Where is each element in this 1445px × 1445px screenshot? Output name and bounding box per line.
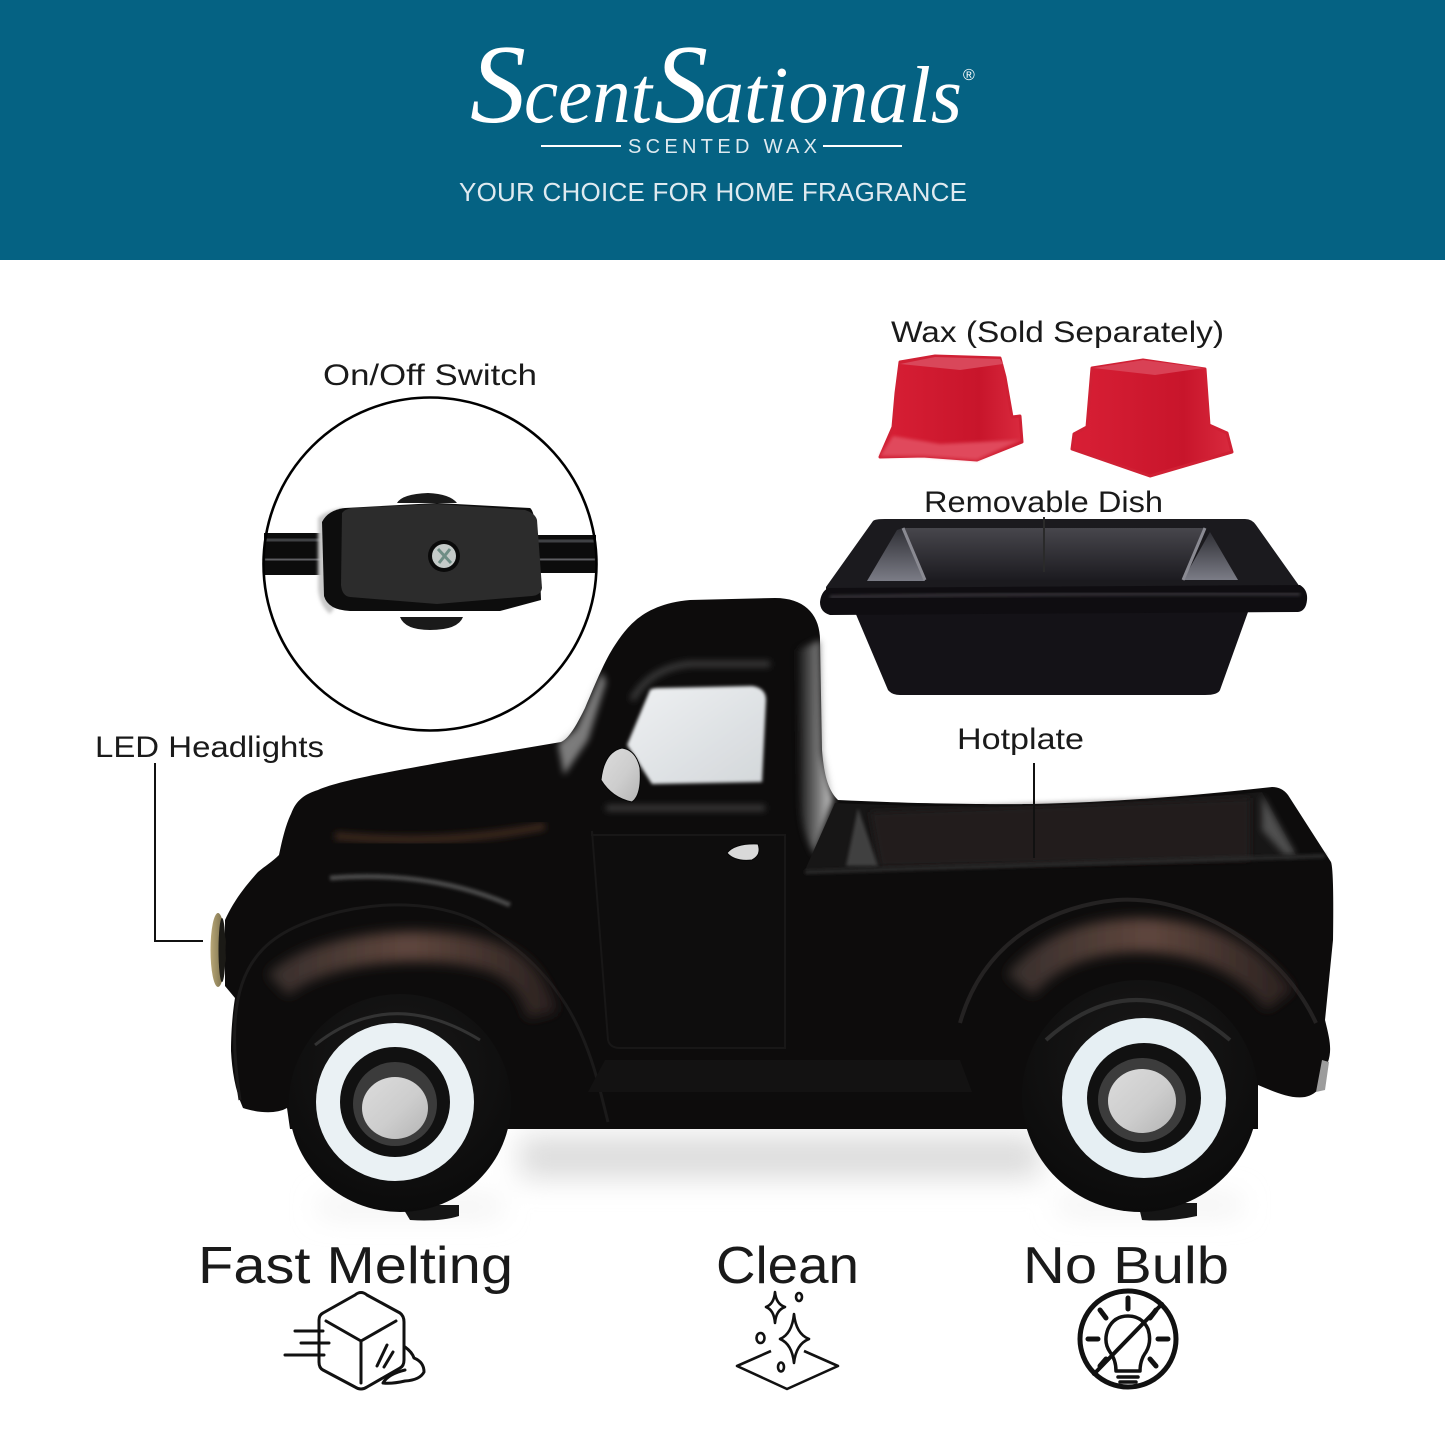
panel: on/off switch (264, 359, 596, 730)
logo subtitle: SCENTED WAX (628, 136, 817, 158)
front fender sheen (278, 946, 542, 1015)
cab window (627, 686, 766, 784)
leader line: removable dish (1043, 517, 1045, 572)
rubber feet (401, 1203, 1197, 1220)
rear wheel (1022, 980, 1258, 1212)
windshield pillar highlight (558, 672, 606, 775)
logo wordmark: ® (963, 67, 975, 84)
feature: clean (716, 1237, 859, 1389)
truck (210, 598, 1333, 1220)
switch circle outline (264, 398, 596, 730)
label: on/off switch: On/Off Switch (323, 359, 537, 392)
panel: wax cubes (880, 316, 1232, 476)
heading: fast melting: Fast Melting (198, 1237, 513, 1295)
front fender (235, 905, 608, 1122)
label: wax: Wax (Sold Separately) (891, 316, 1224, 349)
feature: no bulb (1023, 1237, 1229, 1387)
leader line: hotplate (1033, 763, 1035, 858)
side mirror (601, 748, 640, 802)
icon: crossed-out light bulb (1080, 1291, 1176, 1387)
rear fender (960, 900, 1316, 1023)
logo wordmark (470, 23, 975, 147)
label: removable dish: Removable Dish (924, 486, 1163, 519)
truck body silhouette (225, 598, 1333, 1129)
label: hotplate: Hotplate (957, 723, 1084, 756)
headlight (210, 913, 226, 987)
heading: no bulb: No Bulb (1023, 1237, 1229, 1295)
switch photo (264, 493, 596, 630)
rear fender sheen (1020, 935, 1280, 1000)
rear lamp (1316, 1060, 1329, 1092)
logo wordmark: S (654, 23, 708, 147)
floor shadow under truck (320, 1136, 1240, 1214)
wax cube left (880, 356, 1022, 460)
callout: LED headlights (95, 731, 324, 941)
wax cube right (1072, 360, 1232, 476)
logo wordmark: cent (524, 52, 654, 140)
door outline (592, 831, 785, 1048)
heading: clean: Clean (716, 1237, 859, 1295)
cab rear sheen (797, 640, 833, 855)
running board (588, 1060, 972, 1092)
icon: sparkling clean surface (737, 1292, 838, 1389)
logo wordmark: S (470, 23, 526, 147)
window frame sheen (606, 664, 770, 808)
bed interior (805, 792, 1296, 870)
feature: fast melting (198, 1237, 513, 1389)
panel: removable dish (820, 486, 1307, 695)
callout: hotplate (957, 723, 1084, 858)
dish photo (820, 519, 1307, 695)
door handle (727, 844, 759, 860)
hood sheen (335, 826, 545, 839)
icon: melting ice cube (285, 1292, 424, 1389)
header band (0, 0, 1445, 260)
logo wordmark: ationals (704, 52, 962, 140)
bed lip (805, 856, 1325, 872)
front wheel (289, 994, 511, 1212)
leader line: headlights (155, 763, 203, 941)
label: LED headlights: LED Headlights (95, 731, 324, 764)
tagline: YOUR CHOICE FOR HOME FRAGRANCE (459, 177, 967, 207)
